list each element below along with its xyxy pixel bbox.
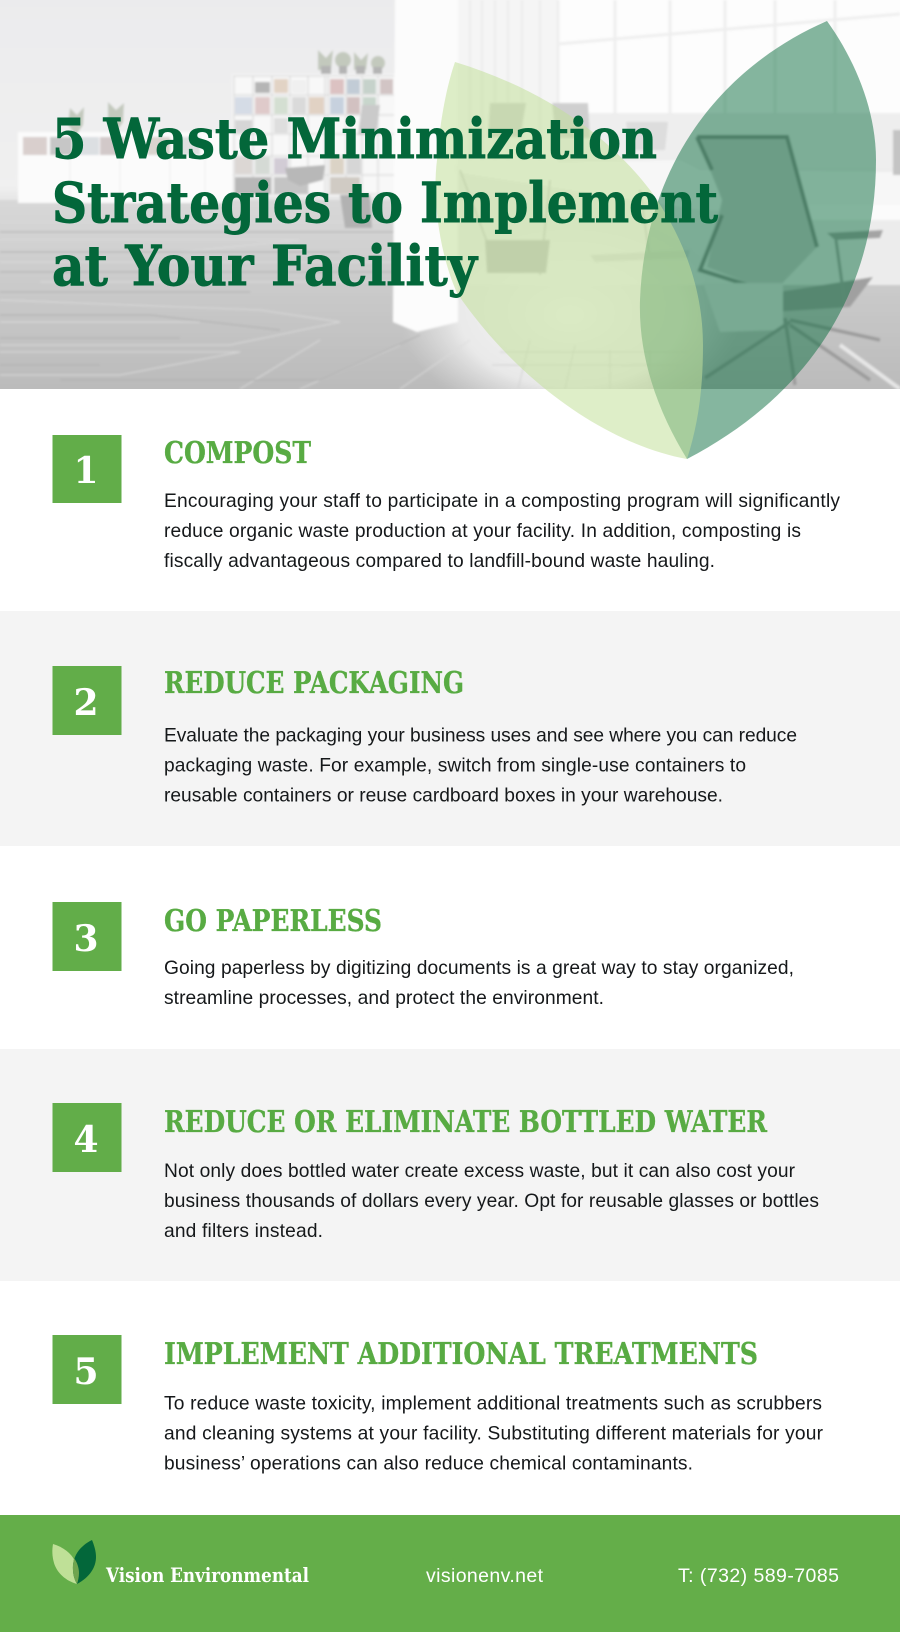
title	[52, 106, 719, 298]
text: additional treatments	[164, 1394, 824, 1474]
brand name: Vision Environmental	[105, 1564, 309, 1587]
panel: go paperless	[52, 902, 794, 1009]
title: at Your Facility	[52, 233, 479, 298]
text: reduce packaging: reusable containers or reuse cardboard boxes in your warehouse.	[164, 786, 723, 806]
title: Strategies to Implement	[52, 170, 719, 235]
number badge 5	[52, 1335, 122, 1404]
text: compost: reduce organic waste production at your facility. In addition, composting is	[164, 521, 801, 542]
band: section 2 background	[0, 611, 900, 846]
number badge 1: 1	[73, 450, 99, 492]
text: go paperless: streamline processes, and protect the environment.	[164, 988, 604, 1009]
band: section 4 background	[0, 1049, 900, 1281]
heading: compost: COMPOST	[164, 435, 311, 470]
number badge 3: 3	[73, 918, 99, 960]
number badge 2	[52, 666, 122, 735]
footer	[0, 1515, 900, 1632]
heading: bottled water: REDUCE OR ELIMINATE BOTTLED WATER	[164, 1104, 767, 1139]
title: 5 Waste Minimization	[52, 106, 657, 171]
number badge 4: 4	[73, 1119, 99, 1161]
text: compost	[164, 491, 840, 572]
leaf: dark green	[640, 21, 876, 459]
text: bottled water	[164, 1161, 819, 1242]
text: additional treatments: business’ operations can also reduce chemical contaminants.	[164, 1454, 693, 1474]
leaf: light green	[436, 62, 703, 459]
text: reduce packaging	[164, 726, 797, 806]
panel: compost	[52, 435, 840, 572]
number badge 4	[52, 1103, 122, 1172]
text: additional treatments: and cleaning systems at your facility. Substituting different materials for your	[164, 1424, 824, 1444]
phone: T: (732) 589-7085	[678, 1565, 839, 1587]
icon: logo leaves	[52, 1540, 96, 1584]
text: go paperless	[164, 958, 794, 1009]
number badge 5: 5	[73, 1351, 99, 1393]
text: bottled water: business thousands of dollars every year. Opt for reusable glasses or bottles	[164, 1191, 819, 1212]
text: go paperless: Going paperless by digitizing documents is a great way to stay organized,	[164, 958, 794, 979]
number badge 3	[52, 902, 122, 971]
text: additional treatments: To reduce waste toxicity, implement additional treatments such as scrubbers	[164, 1394, 822, 1414]
number badge 2: 2	[73, 682, 99, 724]
text: bottled water: Not only does bottled water create excess waste, but it can also cost your	[164, 1161, 796, 1182]
text: reduce packaging: Evaluate the packaging your business uses and see where you can reduce	[164, 726, 797, 746]
heading: go paperless: GO PAPERLESS	[164, 903, 382, 938]
number badge 1	[52, 435, 122, 503]
panel: reduce packaging	[52, 665, 797, 806]
panel: bottled water	[52, 1103, 819, 1242]
text: bottled water: and filters instead.	[164, 1221, 323, 1242]
header photo: washed-out office	[0, 0, 900, 425]
text: compost: fiscally advantageous compared to landfill-bound waste hauling.	[164, 551, 715, 572]
text: reduce packaging: packaging waste. For example, switch from single-use containers to	[164, 756, 746, 776]
website: visionenv.net	[426, 1565, 544, 1587]
heading: additional treatments: IMPLEMENT ADDITIONAL TREATMENTS	[164, 1336, 758, 1371]
heading: reduce packaging: REDUCE PACKAGING	[164, 665, 464, 700]
panel: additional treatments	[52, 1335, 824, 1474]
decorative leaves	[436, 21, 876, 459]
text: compost: Encouraging your staff to participate in a composting program will significantly	[164, 491, 840, 512]
